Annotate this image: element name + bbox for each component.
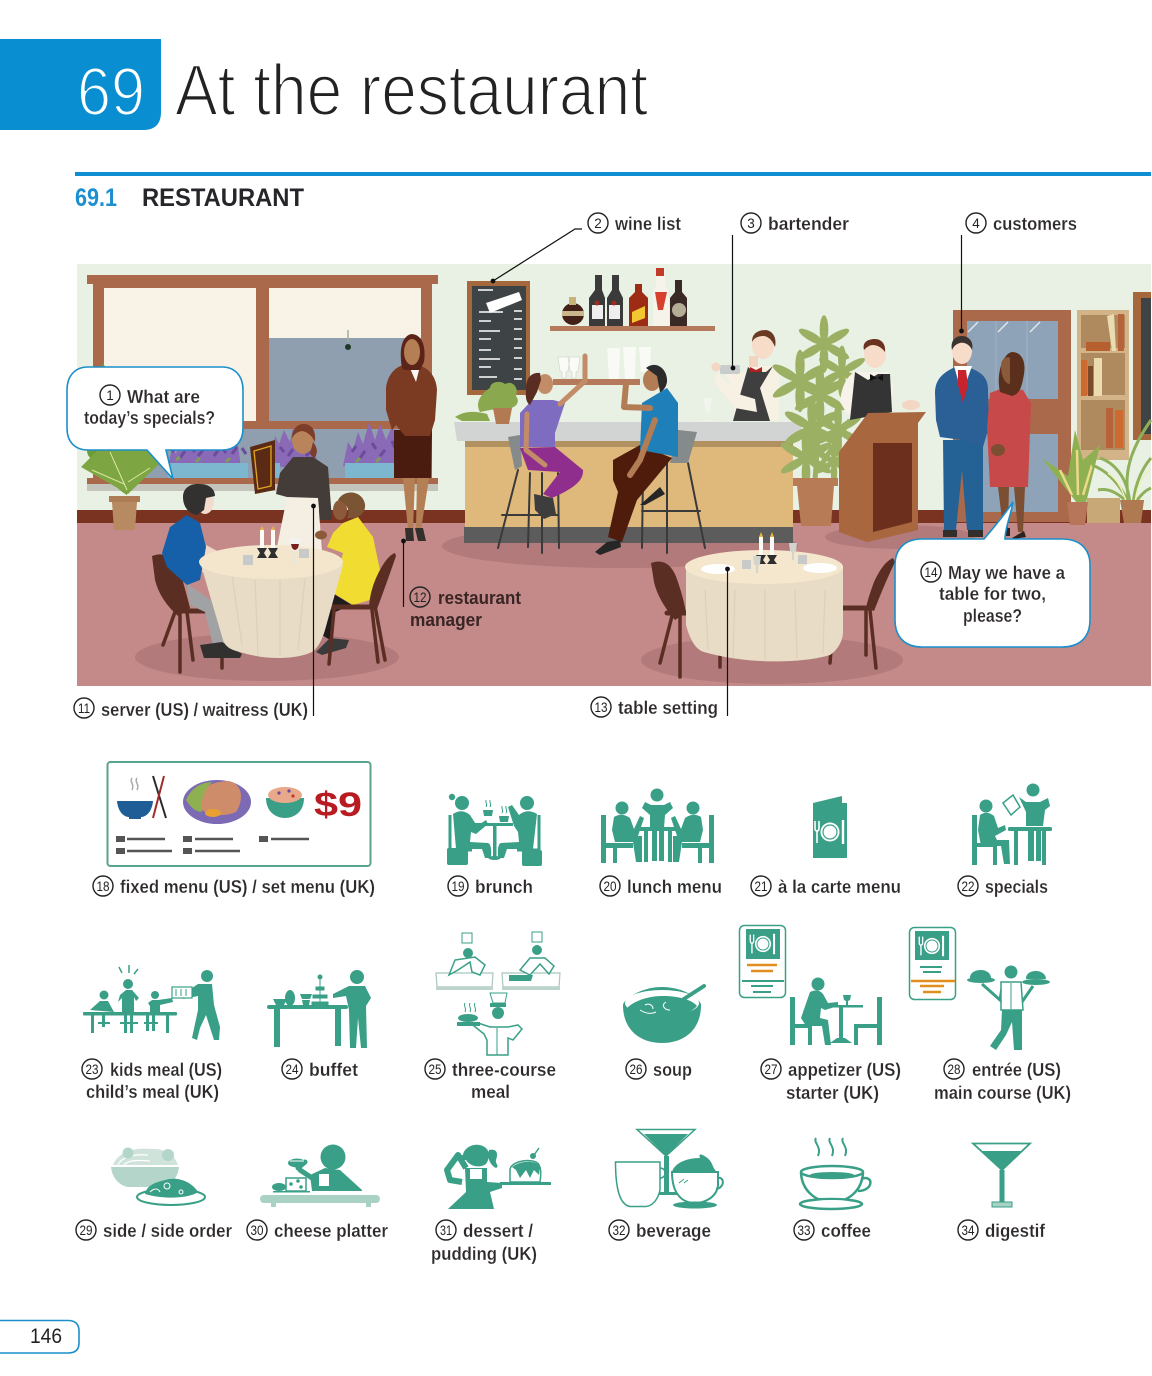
speech bubble: table for two: May we have a	[948, 563, 1066, 583]
label: digestif	[958, 1220, 1046, 1241]
label: digestif: digestif	[985, 1221, 1046, 1241]
label: wine list: wine list	[614, 214, 681, 234]
label: kids meal: child’s meal (UK)	[86, 1082, 219, 1102]
icon: three-course meal	[436, 932, 560, 1055]
host behind podium	[840, 339, 920, 420]
door	[953, 310, 1071, 522]
potted plants right	[1042, 420, 1151, 525]
customers	[935, 336, 1031, 539]
label: brunch: brunch	[475, 877, 533, 897]
label: soup	[626, 1059, 692, 1080]
icon: entree with menu card	[910, 928, 1050, 1050]
icon: side order	[111, 1148, 205, 1205]
label: table setting: 13	[594, 700, 608, 715]
label: dessert	[431, 1220, 537, 1264]
large potted plant	[771, 315, 867, 526]
label: server: 11	[78, 701, 90, 716]
label: beverage	[609, 1220, 711, 1241]
waitress holding menu	[250, 424, 332, 552]
label: a la carte menu: 21	[754, 879, 768, 894]
icon: brunch	[447, 794, 542, 866]
label: kids meal: 23	[86, 1062, 98, 1077]
bartender	[712, 330, 780, 421]
label: three-course meal: three-course	[452, 1060, 556, 1080]
speech bubble: table for two: please?	[963, 606, 1022, 626]
speech bubble: table for two	[895, 502, 1090, 647]
icon: coffee	[800, 1138, 870, 1209]
label: cheese platter: cheese platter	[274, 1221, 388, 1241]
label: appetizer: appetizer (US)	[788, 1060, 901, 1080]
label: beverage: 32	[612, 1223, 626, 1238]
label: entree	[934, 1059, 1071, 1103]
icon: specials	[972, 784, 1052, 865]
label: dessert: dessert /	[463, 1221, 533, 1241]
label: customers	[966, 213, 1077, 234]
label: entree: 28	[948, 1062, 960, 1077]
label: cheese platter: 30	[250, 1223, 264, 1238]
woman in yellow	[315, 493, 380, 655]
label: bartender: 3	[747, 216, 755, 231]
label: appetizer: starter (UK)	[786, 1083, 879, 1103]
label: restaurant manager: manager	[410, 610, 482, 630]
icon: kids meal	[83, 965, 220, 1040]
icon: cheese platter	[260, 1144, 380, 1207]
label: specials	[958, 876, 1048, 897]
header: chapter number block: 69	[77, 54, 145, 130]
label: coffee: coffee	[821, 1221, 871, 1241]
icon: buffet	[267, 970, 371, 1048]
leader: customers	[960, 235, 963, 333]
label: restaurant manager: 12	[414, 590, 426, 605]
section heading	[75, 184, 304, 212]
label: buffet: 24	[286, 1062, 299, 1077]
small potted plant on bar	[455, 382, 518, 424]
label: kids meal: kids meal (US)	[110, 1060, 222, 1080]
icon: soup	[623, 986, 704, 1043]
page number tab	[0, 1320, 79, 1353]
label: wine list	[588, 213, 681, 234]
label: three-course meal: meal	[471, 1082, 510, 1102]
label: server: server (US) / waitress (UK)	[101, 700, 308, 720]
label: specials: specials	[985, 877, 1048, 897]
podium	[825, 412, 975, 549]
icon: dessert server	[447, 1145, 551, 1209]
panel: restaurant scene	[67, 264, 1151, 686]
section rule	[75, 172, 1151, 176]
chair right of right table	[828, 558, 895, 668]
label: coffee	[794, 1220, 871, 1241]
page number tab: 146	[30, 1325, 62, 1348]
leader: restaurant manager	[402, 539, 405, 607]
bar stools and customers at bar	[498, 356, 705, 555]
label: specials: 22	[962, 879, 974, 894]
speech bubble: today's specials	[67, 367, 243, 479]
label: three-course meal: 25	[428, 1062, 442, 1077]
label: soup: soup	[653, 1060, 692, 1080]
label: lunch menu: 20	[604, 879, 616, 894]
label: customers: customers	[993, 214, 1077, 234]
speech bubble: today's specials: today’s specials?	[84, 408, 215, 428]
chair left	[152, 554, 222, 672]
label: digestif: 34	[962, 1223, 975, 1238]
right table group: ground shadow	[641, 636, 903, 684]
bottle shelf	[550, 268, 715, 331]
icon: a la carte menu	[813, 796, 847, 858]
section heading: RESTAURANT	[142, 184, 304, 212]
label: soup: 26	[630, 1062, 642, 1077]
label: kids meal	[82, 1059, 222, 1102]
label: buffet	[282, 1059, 358, 1080]
section heading: 69.1	[75, 184, 117, 212]
speech bubble: table for two: table for two,	[939, 584, 1046, 604]
woman at bar	[520, 356, 585, 519]
header: chapter number block	[0, 39, 161, 130]
label: customers: 4	[972, 216, 980, 231]
label: a la carte menu: à la carte menu	[778, 877, 901, 897]
leader: bartender	[731, 235, 735, 370]
leader: server	[312, 504, 315, 716]
icon: fixed menu card: $9	[314, 786, 362, 824]
label: restaurant manager	[410, 587, 521, 630]
label: beverage: beverage	[636, 1221, 711, 1241]
label: fixed menu: fixed menu (US) / set menu (UK)	[120, 877, 375, 897]
label: side order: 29	[80, 1223, 92, 1238]
label: brunch	[448, 876, 533, 897]
label: three-course meal	[425, 1059, 556, 1102]
label: brunch: 19	[452, 879, 464, 894]
table left with place setting	[199, 526, 343, 658]
label: entree: main course (UK)	[934, 1083, 1071, 1103]
chair right of left table	[329, 553, 396, 664]
label: wine list: 2	[594, 216, 602, 231]
label: appetizer: 27	[764, 1062, 778, 1077]
glass shelf	[553, 347, 651, 385]
label: coffee: 33	[798, 1223, 810, 1238]
speech bubble: today's specials: 1	[106, 388, 114, 403]
label: table setting: table setting	[618, 698, 718, 718]
restaurant manager	[386, 334, 437, 541]
man at bar	[595, 365, 678, 555]
leader: wine list	[491, 229, 582, 283]
label: side order: side / side order	[103, 1221, 232, 1241]
icon: beverage	[616, 1130, 723, 1208]
window with flower boxes	[87, 275, 438, 491]
man in blue	[162, 484, 242, 658]
label: dessert: 31	[440, 1223, 452, 1238]
chair left of right table	[651, 562, 720, 677]
icon: fixed menu card	[108, 762, 370, 866]
label: lunch menu: lunch menu	[627, 877, 722, 897]
icon: appetizer with menu card	[740, 926, 882, 1045]
speech bubble: today's specials: What are	[127, 387, 200, 407]
left table group: ground shadow	[135, 633, 399, 681]
table setting	[685, 532, 843, 661]
speech bubble: table for two: 14	[924, 565, 938, 580]
label: bartender: bartender	[768, 214, 849, 234]
label: restaurant manager: restaurant	[438, 588, 521, 608]
label: entree: entrée (US)	[972, 1060, 1061, 1080]
label: appetizer	[761, 1059, 901, 1103]
title: At the restaurant	[175, 51, 648, 131]
plant by window	[81, 362, 165, 530]
label: dessert: pudding (UK)	[431, 1244, 537, 1264]
leader: table setting	[726, 567, 729, 716]
icon: digestif	[973, 1144, 1030, 1207]
bookshelf	[1077, 292, 1151, 460]
label: buffet: buffet	[309, 1060, 358, 1080]
label: fixed menu: 18	[96, 879, 110, 894]
icon: lunch menu	[601, 788, 714, 863]
bar counter	[442, 398, 802, 568]
menu board: wine list	[467, 281, 530, 395]
